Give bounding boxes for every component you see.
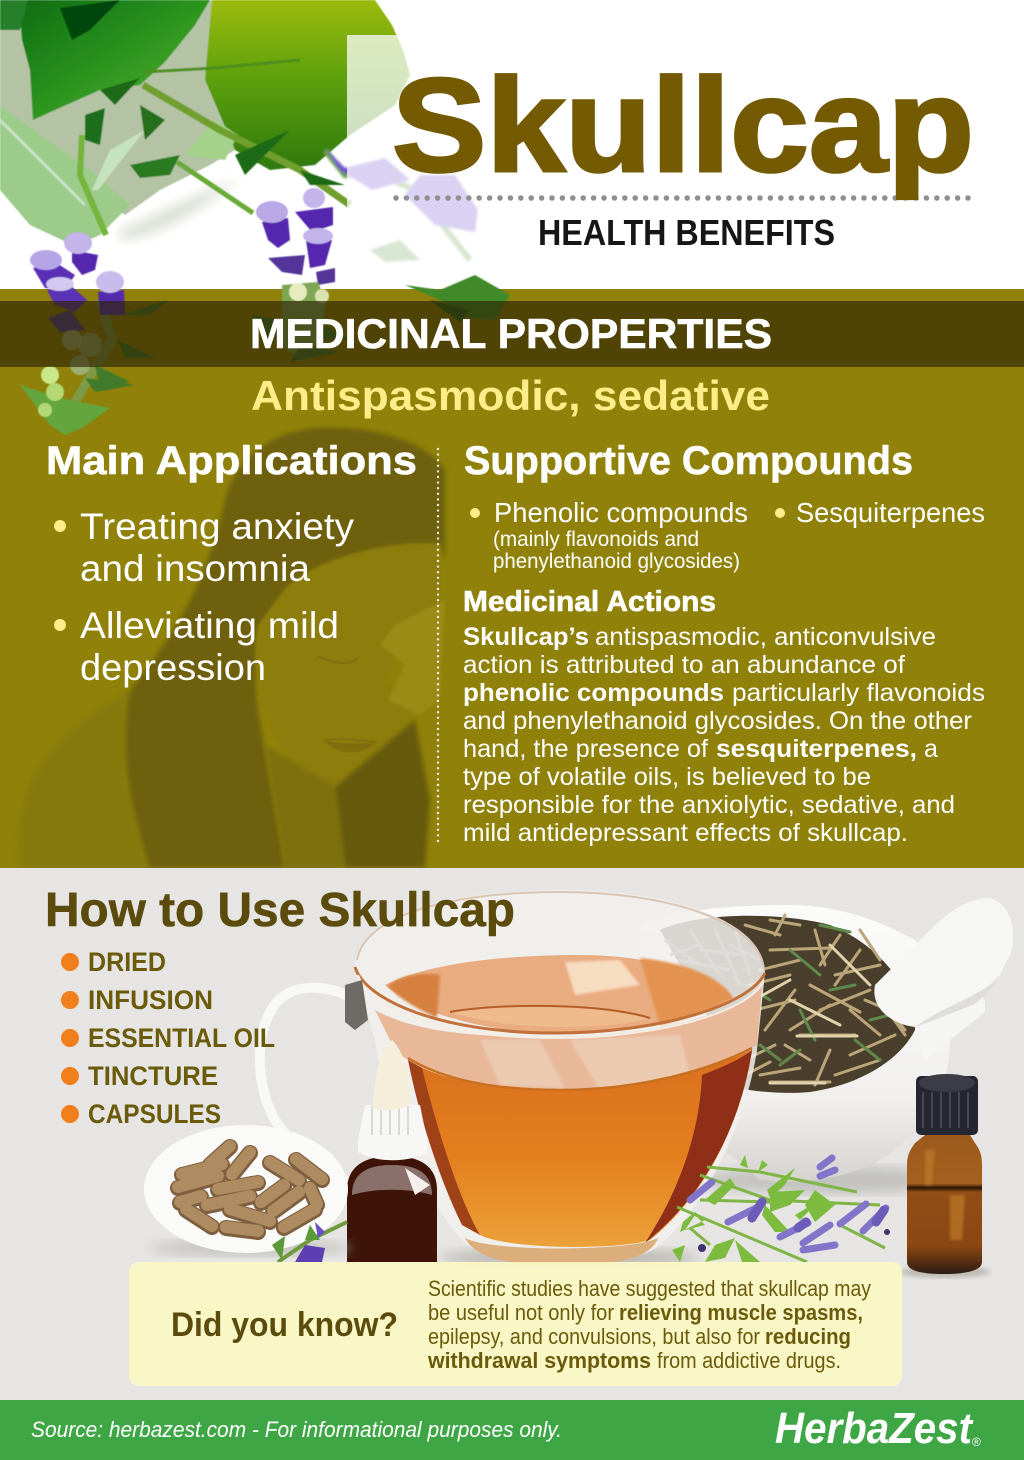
image: woman with headache	[19, 428, 445, 868]
callout heading: Did you know?	[171, 1306, 398, 1344]
main applications list: and insomnia	[80, 548, 310, 589]
supportive compounds list: phenylethanoid glycosides)	[493, 550, 740, 573]
image: essential oil bottle	[900, 1074, 990, 1278]
medicinal actions paragraph: responsible for the anxiolytic, sedative, and	[463, 791, 955, 819]
photo: skullcap leaves	[0, 0, 410, 246]
medicinal actions paragraph: sesquiterpenes,	[716, 735, 917, 763]
dotted rule under title	[396, 195, 978, 201]
callout text: reducing	[765, 1324, 851, 1349]
medicinal actions paragraph: a	[924, 735, 938, 763]
callout text: be useful not only for	[428, 1300, 614, 1325]
medicinal actions paragraph: action is attributed to an abundance of	[463, 651, 905, 679]
supportive compounds list: Sesquiterpenes	[796, 497, 985, 528]
glass band above liquid	[375, 985, 762, 1090]
forms of use list: CAPSULES	[88, 1099, 221, 1129]
callout text: withdrawal symptoms	[427, 1348, 651, 1373]
logo: HerbaZest: ®	[972, 1435, 981, 1449]
cup handle	[260, 988, 358, 1185]
medicinal actions paragraph: Skullcap’s	[463, 623, 589, 651]
image: capsules bowl	[144, 1125, 350, 1256]
supportive compounds list: (mainly flavonoids and	[493, 528, 699, 551]
background: white header	[0, 0, 1024, 290]
medicinal actions paragraph	[463, 623, 985, 847]
supportive compounds list: Phenolic compounds	[494, 497, 748, 528]
main applications list	[54, 506, 355, 688]
medicinal actions paragraph: type of volatile oils, is believed to be	[463, 763, 871, 791]
tea surface	[385, 955, 733, 1033]
medicinal actions heading: Medicinal Actions	[463, 586, 716, 618]
supportive compounds heading: Supportive Compounds	[464, 439, 913, 483]
flower sprigs	[20, 188, 510, 435]
how to use heading: How to Use Skullcap	[45, 884, 515, 937]
callout text: epilepsy, and convulsions, but also for	[428, 1324, 760, 1349]
logo: HerbaZest: HerbaZest	[775, 1404, 974, 1453]
forms of use list: INFUSION	[88, 985, 213, 1015]
translucent title panel	[347, 35, 1024, 273]
main applications list: depression	[80, 647, 266, 688]
medicinal actions paragraph: particularly flavonoids	[732, 679, 985, 707]
tea body	[408, 1050, 752, 1247]
medicinal actions paragraph: and phenylethanoid glycosides. On the other	[463, 707, 972, 735]
forms of use list: TINCTURE	[88, 1061, 218, 1091]
properties subheading: Antispasmodic, sedative	[251, 372, 770, 419]
source line: Source: herbazest.com - For informational purposes only.	[31, 1417, 562, 1442]
medicinal actions paragraph: mild antidepressant effects of skullcap.	[463, 819, 908, 847]
panel: medicinal properties background	[0, 289, 1024, 868]
forms of use list: ESSENTIAL OIL	[88, 1023, 275, 1053]
column divider	[437, 449, 439, 843]
title: Skullcap	[392, 52, 974, 200]
main applications list: Treating anxiety	[80, 506, 355, 547]
subtitle: HEALTH BENEFITS	[538, 212, 835, 253]
image: mortar and dried herb	[640, 898, 1013, 1194]
callout text	[427, 1276, 871, 1373]
callout text: relieving muscle spasms,	[619, 1300, 863, 1325]
medicinal actions paragraph: antispasmodic, anticonvulsive	[595, 623, 936, 651]
forms of use list: DRIED	[88, 947, 166, 977]
panel: how to use background	[0, 868, 1024, 1400]
image: tea cup	[260, 890, 765, 1268]
image: small sprig by capsule bowl	[272, 1222, 347, 1262]
medicinal actions paragraph: phenolic compounds	[463, 679, 724, 707]
medicinal actions paragraph: hand, the presence of	[463, 735, 708, 763]
callout text: Scientific studies have suggested that skullcap may	[428, 1276, 871, 1301]
image: dropper bottle	[347, 1040, 437, 1262]
pale sprig behind title panel	[325, 148, 478, 262]
forms of use list	[61, 947, 275, 1129]
cup glass	[355, 890, 765, 1264]
footer bar	[0, 1400, 1024, 1460]
callout text: from addictive drugs.	[657, 1348, 841, 1373]
main applications list: Alleviating mild	[80, 605, 339, 646]
callout: did you know	[129, 1262, 902, 1386]
main applications heading: Main Applications	[46, 439, 417, 483]
section heading: MEDICINAL PROPERTIES	[250, 310, 772, 357]
image: fresh skullcap sprig	[672, 1155, 890, 1262]
supportive compounds list	[470, 497, 985, 573]
header band	[0, 301, 1024, 367]
